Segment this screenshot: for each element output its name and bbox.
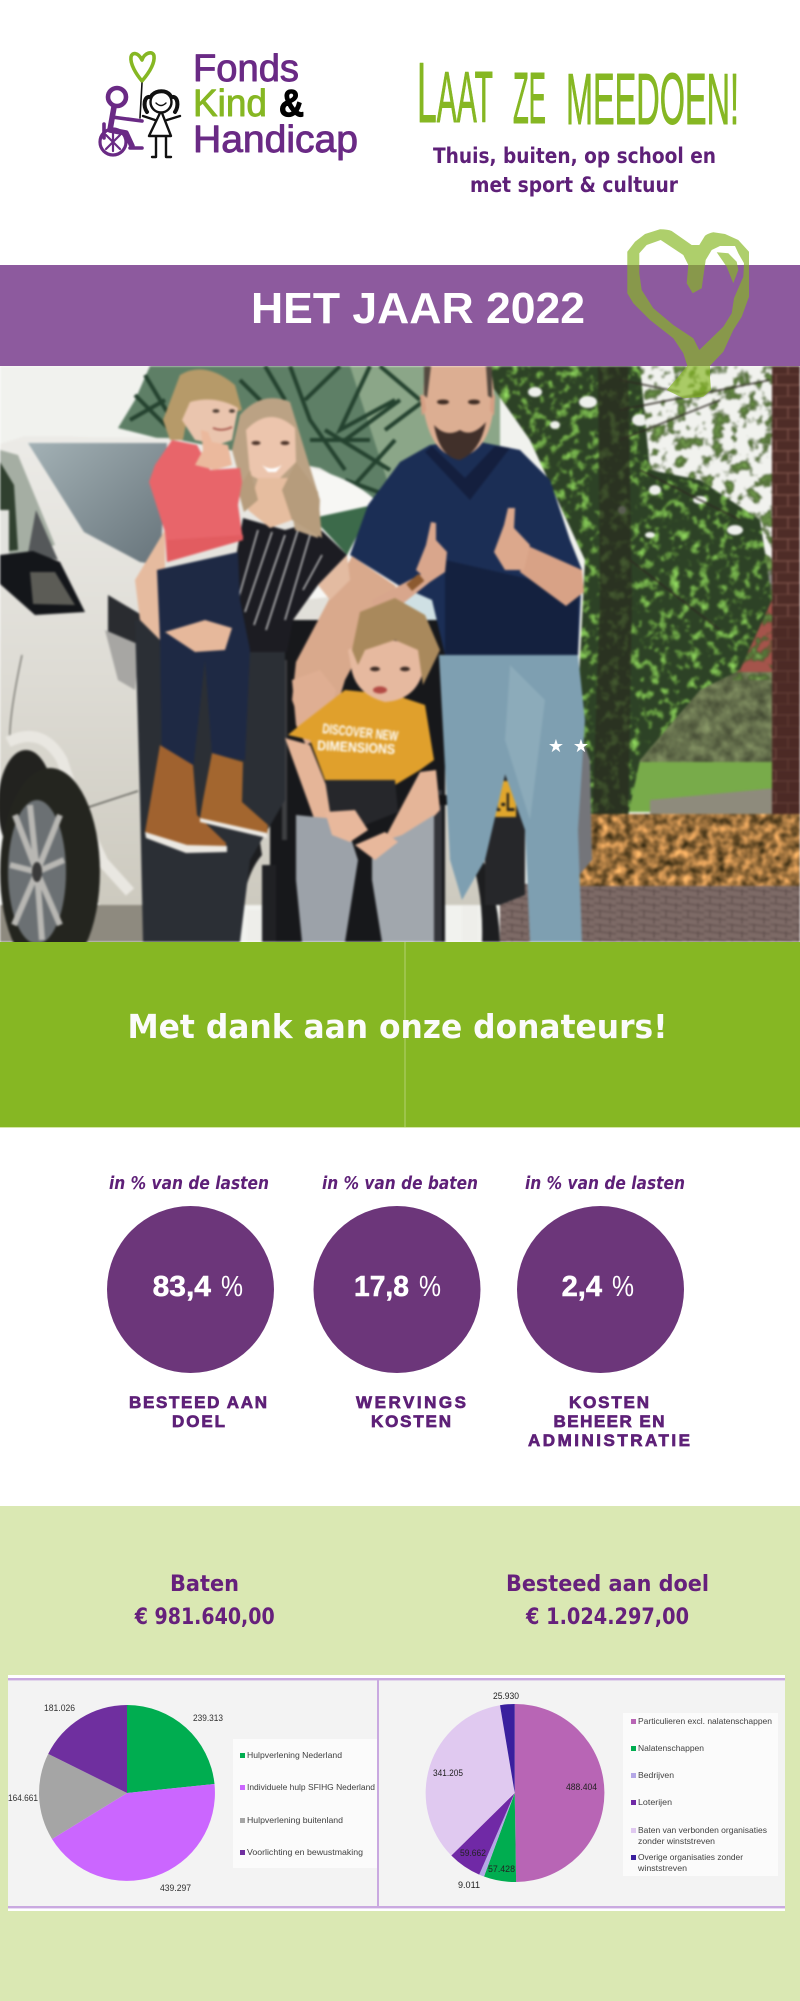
kpi: wervingskosten: KOSTEN: [371, 1412, 451, 1431]
boy t-shirt print: DIMENSIONS: [317, 737, 396, 757]
kpi: besteed aan doel: %: [221, 1271, 243, 1303]
boy t-shirt print: [317, 720, 399, 757]
legend: baten: Bedrijven: [638, 1770, 674, 1780]
banner: Het jaar 2022: HET JAAR 2022: [251, 284, 585, 333]
kpi: kosten beheer en administratie: %: [612, 1271, 634, 1303]
heading: Besteed aan doel: € 1.024.297,00: [525, 1605, 689, 1630]
legend: baten: Baten van verbonden organisaties: [638, 1825, 767, 1835]
heading: Besteed aan doel: [506, 1572, 709, 1630]
logo: Fonds Kind & Handicap: [100, 48, 358, 161]
kpi: kosten beheer en administratie: 2,4: [562, 1271, 602, 1303]
photo: wheelchair: [225, 620, 525, 942]
panel: pie charts: [8, 1675, 785, 1911]
photo background: araucaria tree: [117, 366, 502, 499]
pie chart: besteed aan doel: 439.297: [160, 1882, 191, 1893]
photo: boy: [285, 598, 440, 942]
kpi: kosten beheer en administratie: ADMINISTRATIE: [528, 1431, 690, 1450]
pie chart: besteed aan doel: 164.661: [8, 1792, 38, 1803]
legend: baten: Nalatenschappen: [638, 1743, 704, 1753]
heading: Baten: Baten: [170, 1572, 239, 1597]
stars on photo: [549, 739, 588, 752]
logo wordmark: Kind: [193, 83, 267, 125]
logo wordmark: [193, 48, 358, 161]
legend: baten: Overige organisaties zonder: [638, 1852, 743, 1862]
license plate: 61-L: [484, 787, 515, 817]
logo wordmark: Handicap: [193, 119, 358, 161]
banner: Het jaar 2022: [0, 265, 800, 366]
pie chart: baten: 25.930: [493, 1690, 519, 1701]
boy t-shirt print: DISCOVER NEW: [322, 720, 399, 744]
pie chart: baten: 57.428: [488, 1863, 515, 1874]
pie chart: besteed aan doel: [8, 1702, 223, 1893]
photo: woman: [135, 398, 350, 942]
legend: besteed aan doel: Hulpverlening buitenland: [247, 1815, 343, 1825]
pie chart: besteed aan doel: 239.313: [193, 1712, 223, 1723]
legend: besteed aan doel: Hulpverlening Nederland: [247, 1750, 342, 1760]
subheading: Thuis, buiten: Thuis, buiten, op school en: [433, 144, 716, 168]
logo icon: children and heart balloon: [100, 53, 180, 157]
kpi: wervingskosten: [314, 1173, 480, 1431]
logo wordmark: Fonds: [193, 48, 299, 90]
heading: Baten: € 981.640,00: [134, 1605, 275, 1630]
legend: baten: [623, 1713, 778, 1876]
kpi: wervingskosten: in % van de baten: [322, 1173, 478, 1194]
kpi: besteed aan doel: [107, 1173, 274, 1431]
heading: Baten: [134, 1572, 275, 1630]
photo: man: [292, 366, 592, 942]
legend: baten: zonder winststreven: [638, 1836, 715, 1846]
stars on photo: ★: [573, 736, 589, 757]
green banner: thanks to donors: [0, 942, 800, 1128]
tagline heading: Laat ze meedoen!: ZE: [513, 59, 546, 139]
license plate: [494, 779, 518, 819]
kpi: wervingskosten: WERVINGS: [356, 1393, 466, 1412]
kpi: besteed aan doel: in % van de lasten: [109, 1173, 269, 1194]
tagline heading: Laat ze meedoen!: [417, 46, 739, 141]
kpi: kosten beheer en administratie: KOSTEN: [569, 1393, 649, 1412]
kpi: besteed aan doel: DOEL: [172, 1412, 225, 1431]
logo wordmark: &: [279, 83, 304, 125]
kpi: besteed aan doel: BESTEED AAN: [129, 1393, 267, 1412]
legend: besteed aan doel: Voorlichting en bewustmaking: [247, 1847, 363, 1857]
photo: girl: [145, 369, 268, 853]
stars on photo: ★: [548, 736, 564, 757]
legend: besteed aan doel: Individuele hulp SFIHG Nederland: [247, 1782, 375, 1792]
kpi: kosten beheer en administratie: BEHEER EN: [554, 1412, 664, 1431]
pie chart: baten: [426, 1690, 604, 1890]
kpi: wervingskosten: 17,8: [354, 1271, 409, 1303]
pie chart: baten: 59.662: [460, 1847, 486, 1858]
subheading: Thuis, buiten: met sport & cultuur: [470, 173, 679, 197]
icon: green brush heart: [627, 229, 749, 398]
legend: baten: winststreven: [637, 1863, 687, 1873]
photo: van: [0, 436, 486, 942]
kpi: besteed aan doel: 83,4: [153, 1271, 211, 1303]
kpi: wervingskosten: %: [419, 1271, 441, 1303]
pie chart: baten: 341.205: [433, 1767, 463, 1778]
subheading: Thuis, buiten: [433, 144, 716, 197]
panel: light green finance background: [0, 1506, 800, 2001]
legend: besteed aan doel: [233, 1739, 377, 1868]
heading: Besteed aan doel: Besteed aan doel: [506, 1572, 709, 1597]
legend: baten: Particulieren excl. nalatenschappen: [638, 1716, 772, 1726]
pie chart: baten: 9.011: [458, 1879, 480, 1890]
photo: family with wheelchair and van: [0, 366, 800, 976]
kpi: kosten beheer en administratie: [517, 1173, 690, 1450]
green banner: thanks to donors: Met dank aan onze donateurs!: [128, 1007, 668, 1046]
legend: baten: Loterijen: [638, 1797, 672, 1807]
pie chart: besteed aan doel: 181.026: [44, 1702, 75, 1713]
photo background: garden trees and house: [478, 366, 800, 942]
tagline heading: Laat ze meedoen!: LAAT: [417, 46, 493, 141]
kpi: kosten beheer en administratie: in % van de lasten: [525, 1173, 685, 1194]
pie chart: baten: 488.404: [566, 1781, 597, 1792]
